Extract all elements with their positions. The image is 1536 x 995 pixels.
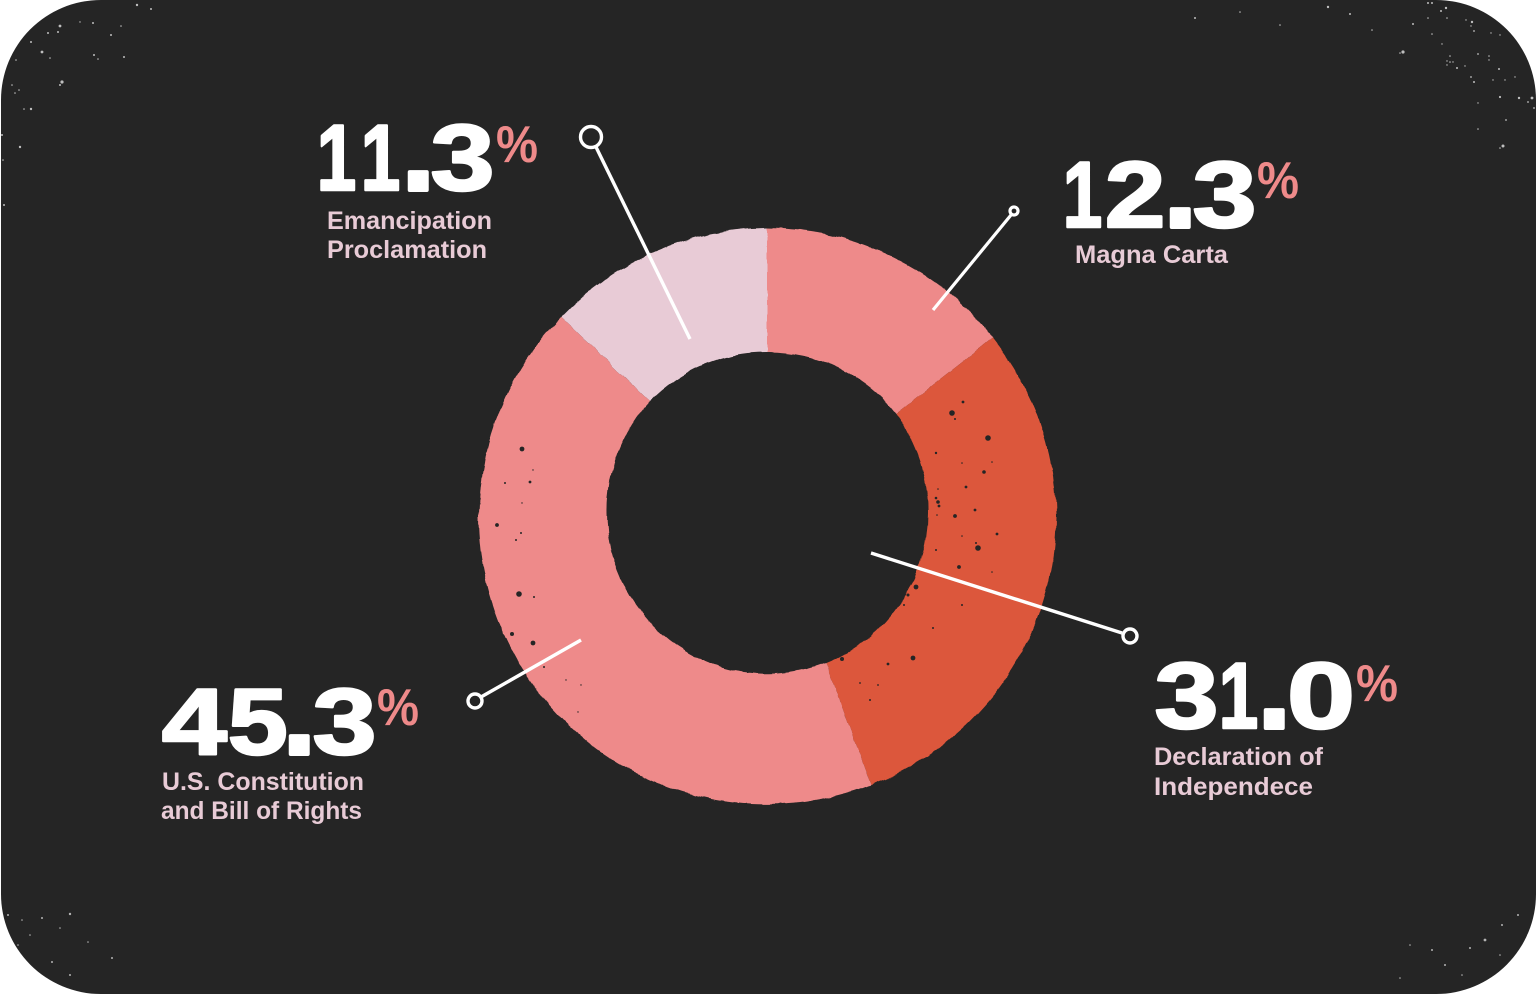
decorative star speckle: bottom left [7,913,113,976]
label: Magna Carta [1075,241,1229,269]
value: 1 [361,105,400,210]
label: and Bill of Rights [161,797,362,825]
value: 1 [1219,643,1258,748]
donut slice: Magna Carta 12.3% [767,228,993,414]
leader line: Magna Carta [933,207,1018,310]
callout: Declaration of Independence [1154,620,1398,801]
label: U.S. Constitution [162,768,364,796]
donut slice: Declaration of Independence 31.0% [826,338,1056,785]
value: 3 [430,105,494,210]
label: Emancipation [327,207,492,235]
callout: Magna Carta [1063,119,1299,269]
value: 3 [1154,643,1218,748]
ink speckles on Declaration slice [840,401,998,701]
percent sign: % [1356,655,1398,713]
donut slice: U.S. Constitution and Bill of Rights 45.3% [479,317,871,804]
label: Independece [1154,773,1313,801]
ink speckles on Constitution slice [495,447,582,713]
value: . [1258,620,1291,754]
value: 0 [1287,643,1355,748]
leader line: Emancipation Proclamation [580,126,690,339]
leader line: U.S. Constitution [468,640,581,708]
value: 2 [1105,142,1166,247]
value: 1 [1063,142,1102,247]
percent sign: % [496,116,538,174]
callout: Emancipation Proclamation [317,82,538,264]
donut slice: Emancipation Proclamation 11.3% [561,228,767,401]
decorative star speckle: top left [1,4,152,206]
decorative star speckle: bottom right [1399,914,1529,979]
value: 4 [162,669,227,774]
callout: U.S. Constitution and Bill of Rights [161,646,419,825]
percent sign: % [1257,152,1299,210]
value: 3 [312,669,376,774]
decorative star speckle: top right [1194,2,1535,149]
value: . [283,646,316,780]
value: 1 [317,105,356,210]
leader line: Declaration of Independence [871,553,1137,643]
label: Proclamation [327,236,487,264]
label: Declaration of [1154,743,1324,771]
donut chart [479,228,1056,804]
value: . [402,82,435,216]
value: 5 [228,669,288,774]
value: . [1164,119,1197,253]
percent sign: % [377,679,419,737]
value: 3 [1192,142,1256,247]
